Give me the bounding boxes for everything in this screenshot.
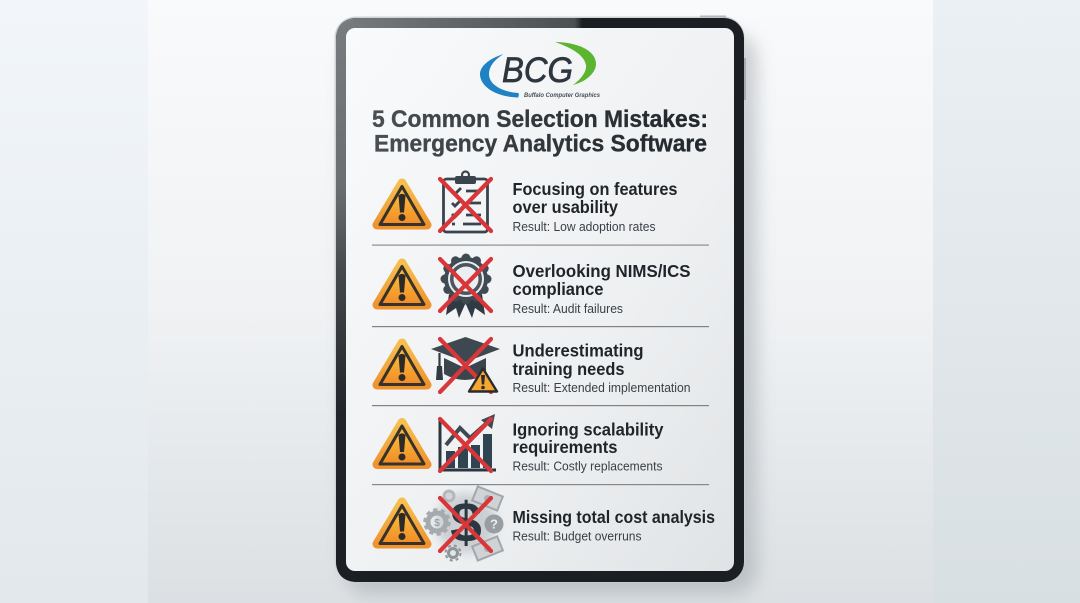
text: mistake 4	[512, 420, 664, 474]
tablet device	[334, 16, 757, 594]
text: mistake 1: Result: Low adoption rates	[512, 219, 656, 234]
icon: crossed-out award ribbon	[440, 254, 492, 318]
text: mistake 5: Missing total cost analysis	[512, 507, 715, 527]
text: mistake 3	[512, 341, 690, 395]
title: 5 Common Selection Mistakes:	[372, 106, 708, 133]
icon: gear bottom	[446, 546, 460, 560]
text: mistake 5: Result: Budget overruns	[512, 529, 642, 544]
icon: dollar sign: $	[450, 491, 482, 555]
text: mistake 4: Result: Costly replacements	[512, 459, 663, 474]
text: mistake 3: training needs	[512, 359, 625, 379]
text: mistake 1	[512, 179, 678, 234]
icon: small warning triangle	[469, 368, 497, 392]
icon: crossed-out growth chart	[440, 414, 496, 471]
icon: crossed-out graduation cap	[431, 337, 500, 392]
title	[372, 106, 708, 158]
icon: warning triangle	[377, 183, 427, 225]
text: mistake 1: over usability	[512, 197, 618, 217]
row 2: NIMS/ICS compliance	[377, 254, 690, 318]
text: mistake 3: Underestimating	[512, 341, 644, 361]
icon: warning triangle	[377, 422, 427, 464]
logo: BCG	[480, 42, 600, 99]
row 1: features over usability	[377, 172, 678, 234]
text: mistake 2: Result: Audit failures	[512, 301, 623, 316]
text: mistake 2	[512, 261, 690, 316]
logo letters: BCG	[502, 51, 573, 90]
row 5: total cost	[377, 486, 715, 561]
logo green swoosh	[555, 42, 596, 85]
icon: warning triangle	[377, 502, 427, 544]
icon: crossed-out cost cluster	[425, 486, 504, 561]
text: mistake 4: requirements	[512, 437, 618, 457]
text: mistake 4: Ignoring scalability	[512, 420, 664, 440]
text: mistake 2: compliance	[512, 279, 604, 299]
icon: warning triangle	[377, 343, 427, 385]
icon: question bubble: ?	[490, 516, 498, 532]
text: mistake 3: Result: Extended implementation	[512, 380, 690, 395]
text: mistake 1: Focusing on features	[512, 179, 678, 199]
row 3: training needs	[377, 337, 690, 395]
icon: money notes	[472, 486, 503, 561]
title: Emergency Analytics Software	[374, 131, 707, 158]
tablet screen	[346, 28, 734, 571]
logo tagline: Buffalo Computer Graphics	[524, 92, 600, 99]
logo blue swoosh	[480, 54, 519, 98]
text: mistake 5	[512, 507, 715, 544]
text: mistake 2: Overlooking NIMS/ICS	[512, 261, 690, 281]
row 4: scalability	[377, 414, 664, 474]
icon: gear left: $	[434, 518, 440, 529]
icon: gear top	[444, 491, 454, 501]
icon: crossed-out checklist	[440, 172, 491, 232]
icon: warning triangle	[377, 263, 427, 305]
